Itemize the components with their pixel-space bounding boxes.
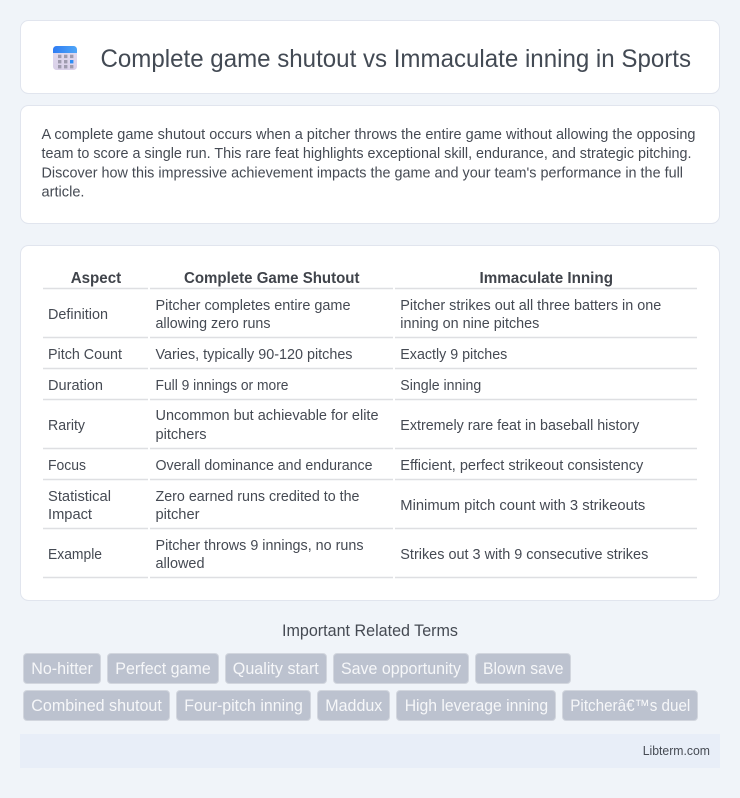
tag: Perfect game bbox=[108, 654, 218, 684]
tag: No-hitter: No-hitter bbox=[31, 660, 93, 678]
tag: Four-pitch inning bbox=[176, 690, 310, 720]
text block: intro: article. bbox=[42, 184, 84, 200]
row: Example: allowed bbox=[156, 556, 204, 572]
tag: Four-pitch inning: Four-pitch inning bbox=[184, 697, 303, 715]
row: Focus: Focus bbox=[48, 458, 86, 474]
row: Rarity: pitchers bbox=[156, 427, 206, 443]
row: Statistical Impact bbox=[48, 489, 645, 523]
row: Statistical Impact: Minimum pitch count with 3 strikeouts bbox=[400, 498, 645, 514]
row: Statistical Impact: Impact bbox=[48, 507, 92, 523]
tag: Combined shutout: Combined shutout bbox=[31, 697, 162, 715]
row: Example: Example bbox=[48, 547, 102, 563]
tag: Blown save bbox=[476, 654, 570, 684]
tag: Maddux: Maddux bbox=[325, 697, 383, 715]
tag: Quality start: Quality start bbox=[233, 660, 319, 678]
row: Rarity: Uncommon but achievable for elite bbox=[156, 408, 378, 424]
row: Focus: Efficient, perfect strikeout consistency bbox=[400, 458, 644, 474]
row: Rarity: Extremely rare feat in baseball history bbox=[400, 418, 640, 434]
footer credit: Libterm.com bbox=[643, 744, 710, 758]
row: Pitch Count: Varies, typically 90-120 pitches bbox=[156, 347, 352, 363]
table header row: Aspect bbox=[71, 270, 121, 287]
text block: intro: team to score a single run. This rare feat highlights exceptional skill, endurance, and strategic pitching. bbox=[42, 146, 692, 162]
tag: Save opportunity bbox=[334, 654, 468, 684]
row: Example: Strikes out 3 with 9 consecutive strikes bbox=[400, 547, 648, 563]
row: Definition bbox=[48, 298, 661, 332]
heading: related terms: Important Related Terms bbox=[282, 622, 458, 640]
row: Statistical Impact: Statistical bbox=[48, 489, 111, 505]
table header row: Immaculate Inning bbox=[480, 270, 613, 287]
row: Focus bbox=[48, 458, 644, 474]
text block: intro bbox=[42, 127, 696, 200]
row: Definition: inning on nine pitches bbox=[400, 316, 539, 332]
row: Statistical Impact: pitcher bbox=[156, 507, 200, 523]
tag: Save opportunity: Save opportunity bbox=[341, 660, 462, 678]
panel: comparison table bbox=[20, 246, 720, 600]
row: Duration: Duration bbox=[48, 378, 103, 394]
table header row bbox=[71, 270, 613, 287]
icon: calendar bbox=[53, 46, 77, 70]
row: Pitch Count bbox=[48, 347, 507, 363]
tag: Blown save: Blown save bbox=[483, 660, 564, 678]
table header row: Complete Game Shutout bbox=[184, 270, 360, 287]
row: Statistical Impact: Zero earned runs credited to the bbox=[156, 489, 360, 505]
text block: intro: Discover how this impressive achievement impacts the game and your team's performance in the full bbox=[42, 166, 683, 182]
row: Duration: Full 9 innings or more bbox=[156, 378, 288, 394]
tag: Quality start bbox=[226, 654, 326, 684]
tag: Maddux bbox=[318, 690, 390, 720]
row: Definition: Pitcher completes entire game bbox=[156, 298, 350, 314]
tag: Pitcher's duel: Pitcherâ€™s duel bbox=[570, 697, 690, 715]
tag: High leverage inning bbox=[396, 690, 556, 720]
title: Complete game shutout vs Immaculate inning in Sports bbox=[100, 45, 691, 73]
footer bbox=[20, 734, 720, 768]
row: Duration: Single inning bbox=[400, 378, 481, 394]
tag: Perfect game: Perfect game bbox=[115, 660, 211, 678]
tag: Combined shutout bbox=[24, 690, 170, 720]
panel: related term tags bbox=[24, 654, 698, 720]
row: Definition: allowing zero runs bbox=[156, 316, 270, 332]
tag: No-hitter bbox=[24, 654, 100, 684]
row: Rarity: Rarity bbox=[48, 418, 86, 434]
text block: intro: A complete game shutout occurs when a pitcher throws the entire game without allowing the opposing bbox=[42, 127, 696, 143]
row: Definition: Pitcher strikes out all three batters in one bbox=[400, 298, 661, 314]
row: Duration bbox=[48, 378, 481, 394]
row: Rarity bbox=[48, 408, 640, 443]
row: Definition: Definition bbox=[48, 307, 108, 323]
row: Example bbox=[48, 538, 648, 572]
tag: Pitcher's duel bbox=[562, 690, 698, 720]
row: Focus: Overall dominance and endurance bbox=[156, 458, 372, 474]
row: Pitch Count: Pitch Count bbox=[48, 347, 122, 363]
row: Pitch Count: Exactly 9 pitches bbox=[400, 347, 507, 363]
row: Example: Pitcher throws 9 innings, no runs bbox=[156, 538, 364, 554]
panel: intro paragraph bbox=[20, 106, 720, 224]
panel: title header bbox=[20, 20, 720, 94]
tag: High leverage inning: High leverage inning bbox=[405, 697, 548, 715]
